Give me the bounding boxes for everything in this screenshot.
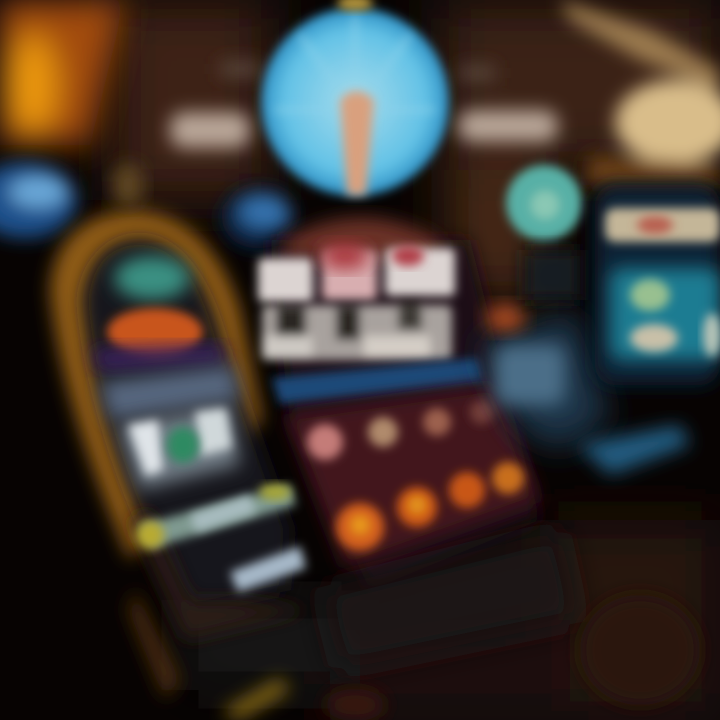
reel window bbox=[118, 405, 240, 490]
red button panel bbox=[285, 385, 540, 570]
white reels top row bbox=[258, 248, 455, 302]
base bbox=[128, 590, 180, 700]
center slot machine bbox=[258, 218, 580, 670]
left blue light bbox=[0, 162, 77, 238]
small blue dome bbox=[222, 188, 294, 248]
white reels second row bbox=[262, 302, 452, 360]
top display bbox=[114, 256, 190, 300]
bottom floor yellow glow bbox=[222, 595, 700, 720]
mid blue machine bbox=[480, 310, 610, 450]
upper buttons bbox=[307, 400, 494, 460]
machine base bbox=[320, 530, 580, 670]
top left orange lamp bbox=[0, 0, 125, 145]
blue band bbox=[272, 358, 484, 404]
right slot machines bbox=[480, 185, 720, 475]
lower orange buttons bbox=[336, 462, 524, 551]
cabinet bbox=[50, 210, 262, 560]
small teal wheel bbox=[506, 165, 582, 241]
sign text glow left and right bbox=[170, 62, 558, 148]
base cabinet bbox=[270, 240, 540, 590]
top right cream lamps bbox=[560, 0, 720, 185]
button panel bbox=[140, 485, 296, 548]
far right machine bbox=[595, 185, 720, 385]
large blue wheel bbox=[261, 0, 449, 196]
crown bbox=[285, 218, 440, 258]
left slot machine bbox=[50, 163, 310, 700]
lower blue highlights bbox=[578, 425, 690, 475]
